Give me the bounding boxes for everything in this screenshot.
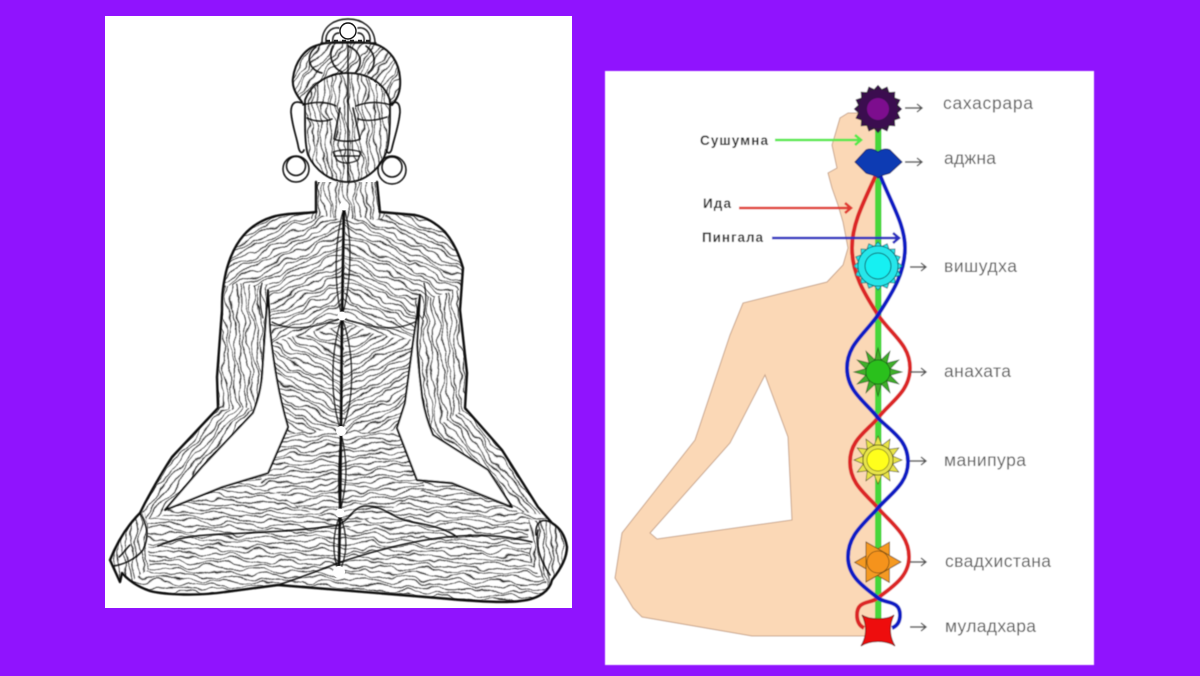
panel: nadi body figure [100, 16, 580, 610]
arrow: muladhara [910, 623, 926, 631]
left arm gap [165, 290, 288, 510]
chakra: vishuddha [854, 242, 902, 290]
seated silhouette [615, 113, 878, 636]
hand details [113, 513, 552, 575]
body outline [110, 182, 567, 602]
nadi texture: hair [293, 43, 400, 102]
right earring [378, 156, 406, 184]
label: svadhisthana: свадхистана [945, 551, 1051, 571]
central channel [339, 206, 344, 565]
arrow: ajna [905, 158, 922, 166]
output arrows [905, 104, 926, 631]
chest lines [260, 283, 426, 328]
label: sahasrara: сахасрара [943, 93, 1033, 113]
label: vishuddha: вишудха [944, 256, 1017, 276]
pingala channel [847, 175, 908, 628]
face outline [305, 73, 390, 182]
figure outlines [110, 19, 567, 602]
ida channel [850, 175, 910, 628]
chakra: anahata [854, 348, 902, 396]
nadi texture: face [305, 74, 390, 182]
eyes and brows [303, 102, 391, 121]
arrow: anahata [910, 368, 926, 376]
label: pingala: Пингала [702, 230, 763, 245]
label: sushumna: Сушумна [700, 133, 768, 148]
knot beads [326, 40, 370, 42]
arrow: sahasrara [905, 104, 922, 112]
panel: chakra diagram [605, 71, 1094, 665]
right arm gap [397, 295, 512, 507]
arrow: vishuddha [910, 263, 926, 271]
nose [334, 108, 360, 141]
hair lobes [309, 46, 374, 73]
side channels [333, 208, 352, 572]
crown line [347, 45, 349, 182]
label: ida: Ида [703, 196, 731, 211]
chakra labels [943, 93, 1051, 636]
top knot [321, 19, 376, 43]
infographic canvas [105, 16, 1095, 666]
knot centre bead [340, 23, 356, 39]
right ear [386, 102, 400, 153]
arrow: pingala [772, 233, 899, 243]
arrow: svadhisthana [910, 558, 926, 566]
left ear [291, 102, 304, 152]
leg crossing lines [158, 506, 457, 546]
sushumna channel [875, 120, 882, 625]
chakra: ajna [855, 149, 902, 178]
chakra: manipura [854, 436, 902, 484]
chakra: svadhisthana [855, 532, 907, 582]
label: anahata: анахата [944, 361, 1011, 381]
label: ajna: аджна [944, 148, 996, 168]
arrow: ida [739, 203, 851, 213]
label: manipura: манипура [944, 450, 1026, 470]
arrow: sushumna [775, 135, 861, 145]
head hair [293, 42, 400, 105]
energy points [333, 202, 348, 578]
chakra: sahasrara [854, 85, 902, 133]
arrow: manipura [910, 457, 926, 465]
lips [333, 150, 361, 163]
nadi texture: body lines [100, 170, 580, 610]
left earring [283, 156, 309, 182]
chakra: muladhara [861, 615, 895, 646]
label: muladhara: муладхара [945, 616, 1036, 636]
